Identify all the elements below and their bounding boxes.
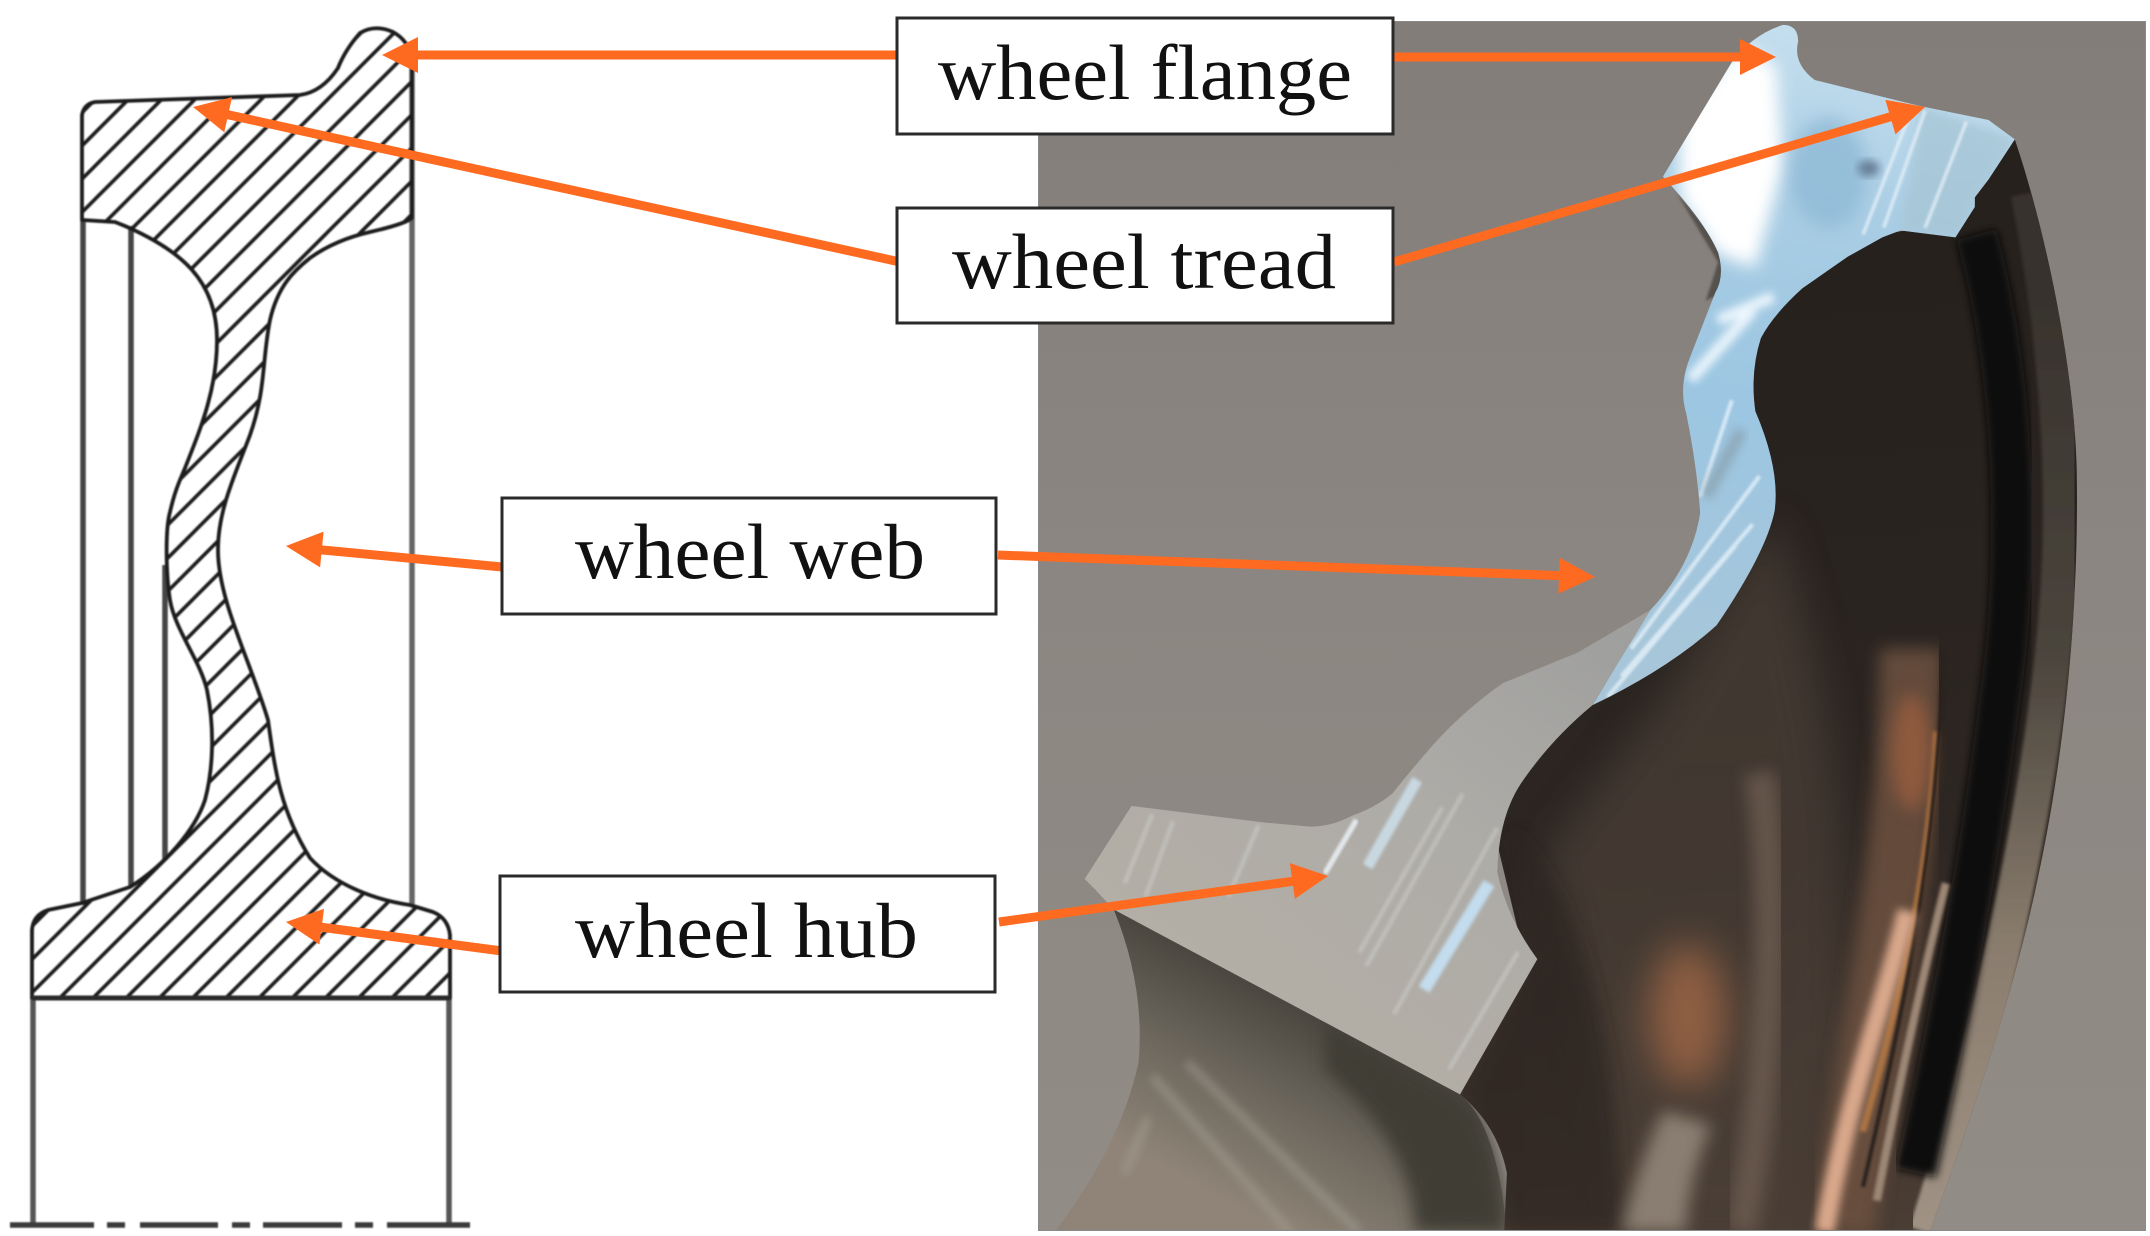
arrow: wheel hub right bbox=[999, 858, 1331, 922]
label: wheel flange: wheel flange bbox=[938, 29, 1352, 116]
gray brown column bbox=[1742, 773, 1770, 1232]
label: wheel web bbox=[502, 498, 996, 614]
arrow: wheel tread left bbox=[189, 89, 900, 262]
photo: machined wheel section bbox=[1038, 21, 2146, 1232]
hub blue streak lower bbox=[1424, 883, 1489, 989]
machined cut face: hub bbox=[1085, 610, 1650, 1094]
dark bore behind flange bbox=[1678, 196, 1721, 301]
hub base line bbox=[32, 996, 450, 1000]
dark lobe lower bbox=[1465, 900, 1623, 1230]
arrow: wheel tread right bbox=[1394, 90, 1930, 262]
vertical construction lines bbox=[33, 60, 449, 1225]
hatched section profile bbox=[32, 28, 450, 998]
technical drawing: wheel cross-section bbox=[10, 28, 470, 1225]
web streaks bbox=[1608, 400, 1760, 697]
black ring strip bbox=[1915, 235, 2012, 1173]
photo background bbox=[1038, 21, 2146, 1231]
hub inner bore bbox=[1054, 909, 1507, 1232]
dark wheel body bbox=[1460, 139, 2077, 1232]
bore dark right band bbox=[1325, 1021, 1507, 1232]
pink copper highlight bbox=[1824, 911, 1907, 1232]
web lobe brown shading bbox=[1548, 537, 1844, 1104]
bronze band bbox=[1842, 649, 1911, 1232]
bore streaks bbox=[1125, 1063, 1359, 1232]
outer rim band bbox=[1926, 193, 2061, 1232]
label: wheel hub: wheel hub bbox=[575, 887, 918, 974]
arrow: wheel web left bbox=[284, 528, 502, 567]
arrow: wheel flange right bbox=[1394, 39, 1776, 75]
label: wheel flange bbox=[897, 18, 1393, 134]
tread edge highlight bbox=[1863, 110, 1966, 235]
machined cut face: web and flange bbox=[1593, 25, 2015, 705]
dark spot bbox=[1857, 160, 1880, 177]
arrow: wheel hub left bbox=[284, 904, 502, 951]
copper glow lower bbox=[1649, 944, 1726, 1087]
arrow: wheel flange left bbox=[382, 37, 897, 73]
label: wheel tread bbox=[897, 208, 1393, 323]
hub white edge bbox=[1325, 820, 1357, 874]
photo edge bbox=[1038, 21, 2146, 1231]
label: wheel hub bbox=[500, 876, 995, 992]
centre line bbox=[10, 1222, 470, 1228]
body overlays bbox=[1463, 193, 2061, 1232]
darker blue patch bbox=[1790, 117, 1867, 228]
hub blue streak upper bbox=[1368, 780, 1417, 867]
label: wheel web: wheel web bbox=[575, 508, 925, 595]
web white highlight bbox=[1690, 297, 1773, 380]
label: wheel tread: wheel tread bbox=[952, 218, 1336, 305]
thin dark ring lines bbox=[1863, 649, 1943, 1187]
hub machining streaks bbox=[1125, 794, 1518, 1070]
tread shade bbox=[1900, 106, 2015, 237]
orange ring line bbox=[1863, 731, 1936, 1132]
cut face details bbox=[1125, 44, 2015, 1069]
arrow: wheel web right bbox=[998, 555, 1596, 595]
wheel section photo shapes bbox=[1054, 25, 2077, 1232]
copper glow upper bbox=[1892, 694, 1931, 810]
flange white highlight bbox=[1679, 44, 1783, 268]
tan highlight beside copper bbox=[1877, 883, 1946, 1201]
gray glow bottom bbox=[1622, 1111, 1711, 1232]
web gray band bbox=[1706, 431, 1742, 497]
